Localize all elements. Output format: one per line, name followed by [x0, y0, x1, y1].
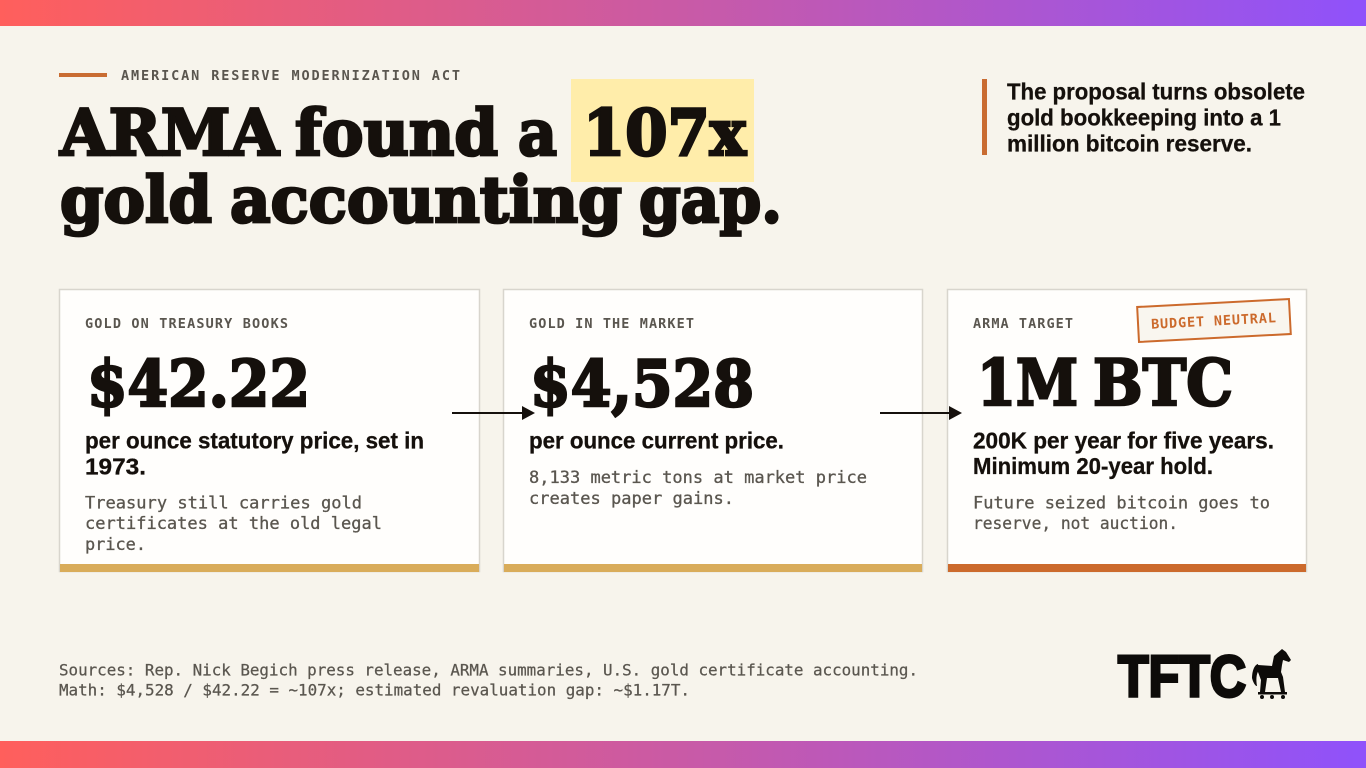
panel: gold in the market: GOLD IN THE MARKET: [529, 316, 694, 332]
sources: Sources: Rep. Nick Begich press release, ARMA summaries, U.S. gold certificate accounting.: [59, 660, 918, 680]
arrow: market to target: [880, 406, 962, 420]
title: gap.: [639, 163, 782, 238]
stamp: budget neutral: BUDGET NEUTRAL: [1151, 310, 1276, 333]
panel: gold in the market: [504, 290, 922, 572]
panel: gold on treasury books: certificates at the old legal: [85, 514, 382, 534]
panel: arma target: [948, 290, 1306, 572]
panel: arma target: reserve, not auction.: [973, 514, 1178, 534]
panel: arma target: ARMA TARGET: [973, 316, 1073, 332]
icon: trojan horse: [1252, 649, 1291, 699]
panel: gold on treasury books: GOLD ON TREASURY BOOKS: [85, 316, 288, 332]
title: accounting: [230, 163, 622, 238]
arrow: books to market: [452, 406, 535, 420]
bottom gradient band: [0, 741, 1366, 768]
panel: gold on treasury books: per ounce statutory price, set in: [85, 428, 424, 454]
sources: [59, 660, 918, 700]
sources: Math: $4,528 / $42.22 = ~107x; estimated revaluation gap: ~$1.17T.: [59, 680, 690, 700]
side note: [982, 78, 1305, 156]
eyebrow: AMERICAN RESERVE MODERNIZATION ACT: [121, 68, 460, 84]
panel: gold in the market: creates paper gains.: [529, 489, 734, 509]
title: gold: [60, 163, 212, 238]
panel: gold on treasury books: Treasury still carries gold: [85, 494, 362, 514]
logo: TFTC: TFTC: [1118, 644, 1246, 710]
panel: arma target: Minimum 20-year hold.: [973, 453, 1213, 479]
top gradient band: [0, 0, 1366, 26]
side note: million bitcoin reserve.: [1007, 130, 1252, 156]
panel: gold on treasury books: price.: [85, 535, 146, 555]
panel: arma target: 1M: [977, 346, 1078, 421]
panel: gold in the market: $4,528: [530, 347, 754, 422]
side note: The proposal turns obsolete: [1007, 78, 1305, 104]
stamp: budget neutral: [1137, 299, 1291, 342]
panel: gold in the market: 8,133 metric tons at market price: [529, 468, 867, 488]
title: found: [295, 96, 498, 171]
panel: gold on treasury books: [60, 290, 480, 572]
panel: arma target: 200K per year for five years.: [973, 428, 1274, 454]
title: 107x: [583, 96, 747, 171]
panel: gold in the market: per ounce current price.: [529, 428, 784, 454]
title: ARMA: [59, 96, 280, 171]
panel: arma target: BTC: [1093, 346, 1233, 421]
panel: gold on treasury books: 1973.: [85, 454, 146, 480]
panel: arma target: Future seized bitcoin goes to: [973, 494, 1270, 514]
panel: gold on treasury books: $42.22: [87, 347, 310, 422]
side note: gold bookkeeping into a 1: [1007, 104, 1281, 130]
title: [59, 79, 782, 238]
title: a: [518, 96, 557, 171]
